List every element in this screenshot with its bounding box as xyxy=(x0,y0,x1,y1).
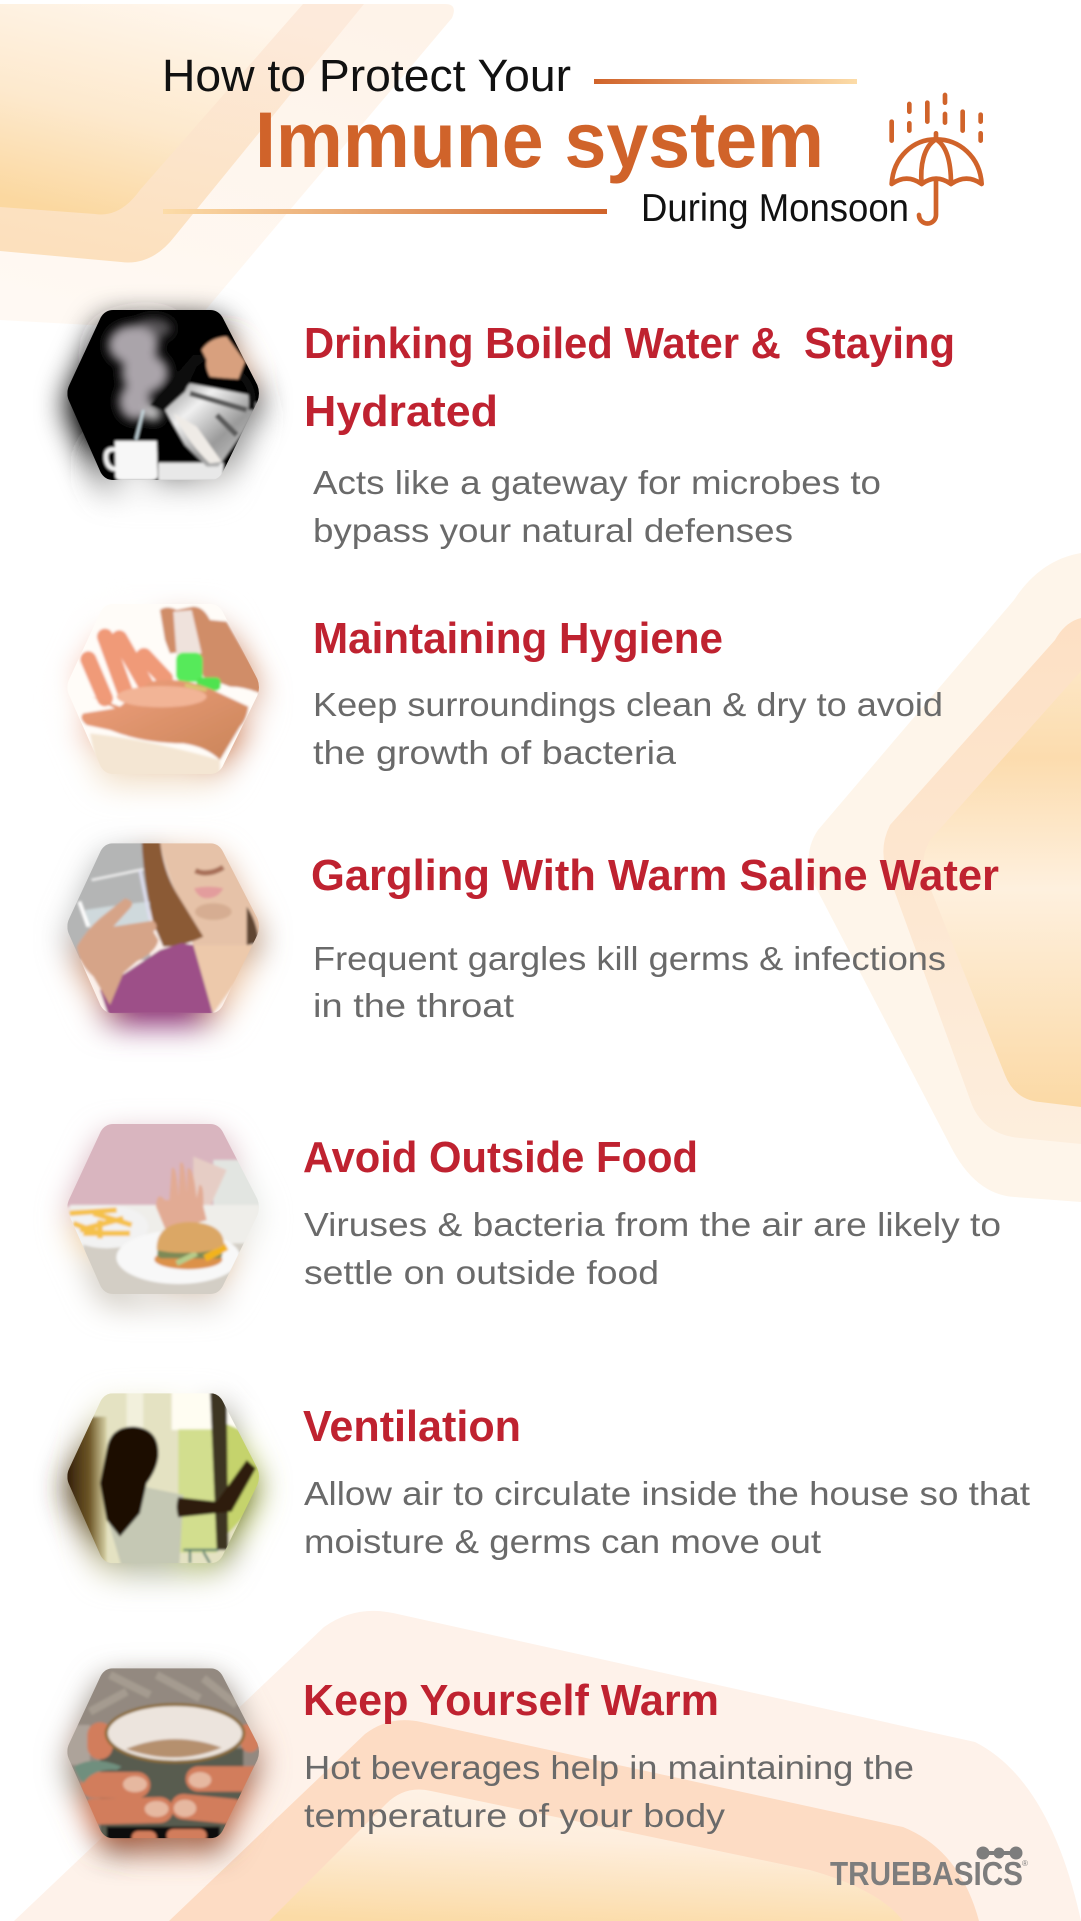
logo mark xyxy=(976,1846,1022,1860)
heading: avoid outside food: Avoid Outside Food xyxy=(303,1133,698,1182)
body text line 1: Hot beverages help in maintaining the xyxy=(304,1749,914,1786)
photo: hands holding tea cup xyxy=(50,1652,280,1863)
body text line 1: Viruses & bacteria from the air are likely to xyxy=(304,1206,1001,1243)
title line: how to protect your: How to Protect Your xyxy=(162,50,571,101)
body text line 1: Frequent gargles kill germs & infections xyxy=(313,940,946,977)
body text line 1: Keep surroundings clean & dry to avoid xyxy=(313,686,943,723)
photo: woman gargling with glass xyxy=(50,827,280,1038)
body text line 2: moisture & germs can move out xyxy=(304,1523,821,1560)
item 2: hygiene xyxy=(50,587,943,798)
registered mark: ® xyxy=(1022,1859,1028,1868)
photo: woman opening curtain xyxy=(50,1377,280,1588)
heading: gargling: Gargling With Warm Saline Water xyxy=(311,851,999,900)
title block xyxy=(162,50,909,230)
body text line 2: the growth of bacteria xyxy=(313,734,677,771)
heading line 2: Hydrated xyxy=(304,387,498,436)
background shapes: right xyxy=(809,553,1081,1202)
photo: kettle pouring into mug xyxy=(50,295,280,506)
body text line 1: Acts like a gateway for microbes to xyxy=(313,464,881,501)
logo wordmark: TRUEBASICS xyxy=(830,1855,1023,1892)
item 1: boiled water xyxy=(50,295,955,549)
title line: during monsoon: During Monsoon xyxy=(641,187,909,230)
item 5: ventilation xyxy=(50,1377,1030,1588)
icon: umbrella with rain xyxy=(892,95,982,223)
item 6: keep warm xyxy=(50,1652,914,1863)
heading: maintaining hygiene: Maintaining Hygiene xyxy=(313,614,723,663)
heading: keep yourself warm: Keep Yourself Warm xyxy=(303,1676,719,1725)
background shapes: top left xyxy=(0,4,454,330)
heading: drinking boiled water: Drinking Boiled Water & Staying xyxy=(304,319,955,368)
title rule bottom xyxy=(163,209,607,214)
title rule top xyxy=(594,79,857,84)
body text line 1: Allow air to circulate inside the house so that xyxy=(304,1475,1030,1512)
heading: ventilation: Ventilation xyxy=(303,1402,521,1451)
item 4: outside food xyxy=(50,1107,1001,1311)
photo: hand refusing burger xyxy=(50,1107,280,1311)
background shapes: bottom xyxy=(14,1611,1081,1921)
body text line 2: in the throat xyxy=(313,987,514,1024)
title line: immune system: Immune system xyxy=(255,95,824,184)
body text line 2: bypass your natural defenses xyxy=(313,512,793,549)
body text line 2: temperature of your body xyxy=(304,1797,726,1834)
photo: sanitiser on hands xyxy=(62,599,278,801)
body text line 2: settle on outside food xyxy=(304,1254,659,1291)
logo: truebasics xyxy=(830,1846,1028,1892)
item 3: gargling xyxy=(50,827,999,1038)
